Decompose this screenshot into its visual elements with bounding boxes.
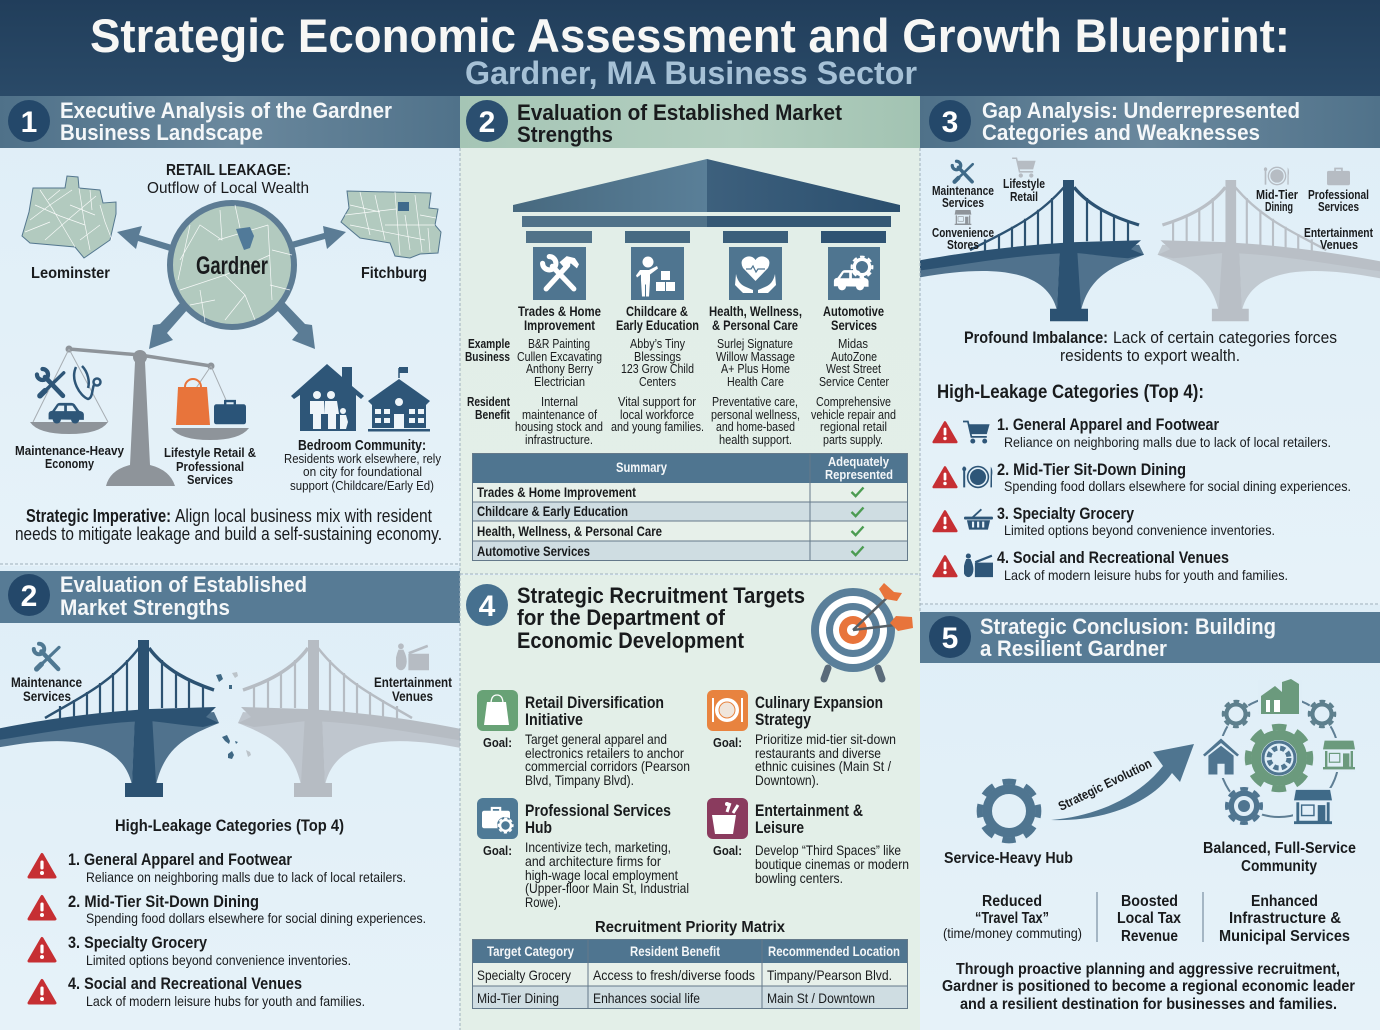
- row labels: Business: [465, 349, 510, 364]
- card: professional services: Hub: [525, 818, 552, 837]
- diagram: balanced community: Community: [1241, 858, 1317, 875]
- list: high-leakage categories: Reliance on neighboring malls due to lack of local retailers.: [1004, 434, 1331, 450]
- column: health, wellness and personal care: Surlej Signature: [717, 336, 793, 351]
- text: strategic imperative: Align local business mix with resident: [175, 506, 432, 526]
- broken bridge illustration: [911, 180, 1380, 321]
- list: high-leakage categories: Reliance on neighboring malls due to lack of local retailers.: [86, 869, 406, 885]
- benefit: boosted local tax revenue: Boosted: [1121, 893, 1178, 910]
- column: automotive services: [811, 247, 896, 447]
- column: trades and home improvement: [515, 247, 603, 447]
- icons: maintenance tools and car: [37, 366, 100, 424]
- card: culinary expansion: Prioritize mid-tier sit-down: [755, 731, 896, 747]
- card: retail diversification: electronics retailers to anchor: [525, 745, 684, 761]
- benefit: reduced travel tax: [943, 893, 1082, 941]
- heading: section 2 left: 2: [21, 580, 37, 613]
- heading: section 5: a Resilient Gardner: [980, 636, 1167, 661]
- heading: section 2 centre: Evaluation of Established Market: [517, 100, 842, 125]
- summary table: Childcare & Early Education: [477, 503, 628, 519]
- column: childcare and early education: [611, 247, 704, 434]
- arrow: strategic evolution: [1051, 744, 1194, 820]
- list: high-leakage categories: 1. General Apparel and Footwear: [997, 415, 1219, 434]
- row labels: Benefit: [475, 407, 511, 422]
- card: entertainment and leisure: Entertainment &: [755, 801, 863, 820]
- panel: executive analysis: [0, 96, 460, 566]
- column: health, wellness and personal care: Preventative care,: [712, 394, 798, 409]
- list: high-leakage categories: 1. General Apparel and Footwear: [68, 850, 292, 869]
- scale comparing economy: [15, 346, 256, 487]
- scale comparing economy: Maintenance-Heavy: [15, 443, 125, 458]
- panel: market strengths, centre column: [460, 96, 920, 574]
- label: maintenance services: Maintenance: [11, 674, 82, 690]
- card: entertainment and leisure: Leisure: [755, 818, 804, 837]
- row labels: Resident: [467, 394, 511, 409]
- summary table: Health, Wellness, & Personal Care: [477, 523, 662, 539]
- card: culinary expansion: [707, 690, 896, 788]
- card: entertainment and leisure: [707, 798, 909, 886]
- column: childcare and early education: 123 Grow Child: [621, 361, 694, 376]
- column: trades and home improvement: Improvement: [524, 317, 595, 333]
- list: high-leakage categories: 4. Social and Recreational Venues: [997, 548, 1229, 567]
- diagram: balanced community: Balanced, Full-Service: [1203, 840, 1356, 857]
- heading: section 4: [466, 583, 805, 653]
- heading: section 3: 3: [942, 106, 958, 139]
- column: automotive services: AutoZone: [831, 349, 877, 364]
- summary table: Represented: [825, 467, 893, 482]
- column: trades and home improvement: Anthony Berry: [526, 361, 593, 376]
- list: high-leakage categories: 4. Social and Recreational Venues: [68, 974, 302, 993]
- text: bedroom community: support (Childcare/Early Ed): [290, 478, 434, 493]
- benefit: reduced travel tax: (time/money commuting): [943, 925, 1082, 941]
- table: recruitment priority matrix: Resident Benefit: [630, 943, 720, 959]
- list: high-leakage categories: Lack of modern leisure hubs for youth and families.: [1004, 567, 1288, 583]
- heading: section 4: for the Department of: [517, 605, 725, 630]
- column: trades and home improvement: Trades & Home: [518, 303, 601, 319]
- label: mid-tier dining: Dining: [1265, 199, 1293, 214]
- text: profound imbalance: residents to export wealth.: [1060, 346, 1240, 365]
- card: retail diversification: Target general apparel and: [525, 731, 667, 747]
- table: recruitment priority matrix: Target Category: [487, 943, 574, 959]
- card: retail diversification: Goal:: [483, 735, 512, 750]
- card: entertainment and leisure: boutique cinemas or modern: [755, 856, 909, 872]
- text: conclusion: Through proactive planning and aggressive recruitment,: [956, 961, 1340, 978]
- heading: section 5: [920, 612, 1380, 663]
- card: culinary expansion: ethnic cuisines (Main St /: [755, 758, 891, 774]
- column: trades and home improvement: B&R Painting: [528, 336, 590, 351]
- card: culinary expansion: restaurants and diverse: [755, 745, 881, 761]
- heading: section 3: Gap Analysis: Underrepresented: [982, 98, 1300, 123]
- summary table: Summary: [616, 459, 667, 475]
- column: health, wellness and personal care: Health, Wellness,: [709, 303, 802, 319]
- list: high-leakage categories: Lack of modern leisure hubs for youth and families.: [86, 993, 365, 1009]
- column: childcare and early education: Abby’s Tiny: [630, 336, 685, 351]
- label: lifestyle retail: [1003, 158, 1045, 204]
- heading: section 5: Strategic Conclusion: Building: [980, 614, 1276, 639]
- scale comparing economy: Services: [187, 472, 233, 487]
- benefit: enhanced infrastructure: Infrastructure &: [1229, 910, 1341, 927]
- list: high-leakage categories: [934, 415, 1351, 583]
- scale comparing economy: Lifestyle Retail &: [164, 445, 256, 460]
- heading: high-leakage categories: High-Leakage Categories (Top 4):: [937, 382, 1204, 403]
- card: culinary expansion: Goal:: [713, 735, 742, 750]
- title banner: Gardner, MA Business Sector: [465, 55, 917, 91]
- node: stores: [1293, 738, 1356, 826]
- benefit: boosted local tax revenue: Local Tax: [1117, 910, 1181, 927]
- heading: section 3: [920, 96, 1380, 148]
- column: automotive services: Comprehensive: [816, 394, 891, 409]
- list: high-leakage categories: Limited options beyond convenience inventories.: [86, 952, 351, 968]
- label: convenience stores: [932, 210, 994, 252]
- card: entertainment and leisure: Goal:: [713, 843, 742, 858]
- card: professional services: (Upper-floor Main St, Industrial: [525, 880, 689, 896]
- label: entertainment venues: [1304, 225, 1374, 252]
- map: Leominster: [22, 176, 116, 282]
- panel: market strengths, left column: [0, 566, 471, 1030]
- heading: section 4: 4: [479, 590, 496, 623]
- list: high-leakage categories: Spending food dollars elsewhere for social dining experiences.: [86, 910, 426, 926]
- column: trades and home improvement: Electrician: [534, 374, 585, 389]
- card: retail diversification: Initiative: [525, 710, 583, 729]
- table: recruitment priority matrix: Main St / Downtown: [767, 990, 875, 1006]
- retail leakage heading: RETAIL LEAKAGE:: [166, 162, 291, 179]
- card: professional services: Goal:: [483, 843, 512, 858]
- label: entertainment venues: Venues: [1320, 237, 1358, 252]
- card: professional services: Professional Services: [525, 801, 671, 820]
- benefit: boosted local tax revenue: Revenue: [1121, 928, 1178, 945]
- node: town buildings: [1258, 679, 1302, 714]
- column: trades and home improvement: Cullen Excavating: [517, 349, 602, 364]
- card: professional services: [477, 798, 689, 910]
- label: mid-tier dining: Mid-Tier: [1256, 187, 1298, 202]
- label: entertainment venues: Venues: [392, 688, 433, 704]
- text: profound imbalance: [964, 328, 1337, 365]
- card: entertainment and leisure: bowling centers.: [755, 870, 843, 886]
- label: convenience stores: Stores: [947, 237, 979, 252]
- card: retail diversification: commercial corridors (Pearson: [525, 758, 690, 774]
- node: house: [1203, 736, 1240, 778]
- heading: section 2 left: Evaluation of Established: [60, 572, 307, 597]
- text: strategic imperative: [15, 506, 442, 544]
- benefit: boosted local tax revenue: [1117, 893, 1181, 945]
- table: recruitment priority matrix: Recommended Location: [768, 943, 900, 959]
- text: bedroom community: Residents work elsewhere, rely: [284, 451, 441, 466]
- heading: section 1: [0, 96, 460, 148]
- column: automotive services: Automotive: [823, 303, 884, 319]
- column: health, wellness and personal care: health support.: [719, 432, 792, 447]
- text: profound imbalance: Lack of certain categories forces: [1113, 328, 1337, 347]
- column: health, wellness and personal care: [709, 247, 802, 447]
- card: culinary expansion: Culinary Expansion: [755, 693, 883, 712]
- row labels: Example: [468, 336, 510, 351]
- arrows: leakage outflow: [117, 226, 346, 349]
- column: trades and home improvement: infrastructure.: [525, 432, 593, 447]
- benefit: enhanced infrastructure: [1219, 893, 1350, 945]
- card: entertainment and leisure: Develop “Third Spaces” like: [755, 842, 901, 858]
- heading: high-leakage categories: High-Leakage Categories (Top 4): [115, 816, 344, 835]
- card: retail diversification: Retail Diversification: [525, 693, 664, 712]
- column: health, wellness and personal care: & Personal Care: [712, 317, 798, 333]
- column: childcare and early education: Early Education: [616, 317, 699, 333]
- column: health, wellness and personal care: A+ Plus Home: [721, 361, 790, 376]
- column: automotive services: West Street: [826, 361, 881, 376]
- column: automotive services: Service Center: [819, 374, 890, 389]
- column: health, wellness and personal care: Willow Massage: [716, 349, 795, 364]
- heading: section 3: Categories and Weaknesses: [982, 120, 1260, 145]
- list: high-leakage categories: 3. Specialty Grocery: [997, 504, 1134, 523]
- text: strategic imperative: needs to mitigate leakage and build a self-sustaining economy.: [15, 524, 442, 544]
- label: maintenance services: Maintenance: [932, 183, 994, 198]
- icons: shopping bag and briefcase: [176, 379, 246, 425]
- panel: gap analysis: [911, 96, 1380, 604]
- icon: service-heavy hub gear: [944, 782, 1073, 867]
- benefit: reduced travel tax: Reduced: [982, 893, 1042, 910]
- column: automotive services: regional retail: [820, 419, 887, 434]
- temple roof: [513, 159, 900, 243]
- label: lifestyle retail: Lifestyle: [1003, 176, 1045, 191]
- column: childcare and early education: Centers: [639, 374, 676, 389]
- column: trades and home improvement: maintenance of: [522, 407, 597, 422]
- retail leakage heading: [147, 162, 309, 197]
- label: maintenance services: Services: [942, 195, 984, 210]
- column: childcare and early education: and young families.: [611, 419, 704, 434]
- icon: service-heavy hub gear: Service-Heavy Hub: [944, 850, 1073, 867]
- benefit: enhanced infrastructure: Enhanced: [1251, 893, 1318, 910]
- title banner: [0, 0, 1380, 96]
- label: professional services: Services: [1318, 199, 1359, 214]
- scale comparing economy: Professional: [176, 459, 244, 474]
- table: recruitment priority matrix: Access to fresh/diverse foods: [593, 967, 755, 983]
- card: professional services: Rowe).: [525, 894, 561, 910]
- text: bedroom community: Bedroom Community:: [298, 437, 426, 454]
- column: childcare and early education: Childcare &: [626, 303, 688, 319]
- arrow: strategic evolution: Strategic Evolution: [1056, 755, 1154, 814]
- list: high-leakage categories: Spending food dollars elsewhere for social dining experiences.: [1004, 478, 1351, 494]
- summary table: [472, 453, 908, 561]
- card: culinary expansion: Strategy: [755, 710, 811, 729]
- icon: target with arrows: [811, 583, 913, 679]
- card: culinary expansion: Downtown).: [755, 772, 819, 788]
- card: professional services: high-wage local employment: [525, 867, 678, 883]
- scale comparing economy: Economy: [45, 456, 95, 471]
- map: Leominster: Leominster: [31, 265, 110, 282]
- list: high-leakage categories: 2. Mid-Tier Sit-Down Dining: [997, 460, 1186, 479]
- column: childcare and early education: Vital support for: [618, 394, 697, 409]
- row labels: [465, 336, 511, 422]
- node: gears: [1221, 699, 1337, 826]
- map circle: Gardner: [170, 203, 294, 327]
- heading: section 2 centre: 2: [479, 106, 495, 139]
- label: entertainment venues: [374, 643, 452, 704]
- label: maintenance services: [932, 161, 994, 210]
- column: health, wellness and personal care: personal wellness,: [711, 407, 800, 422]
- list: high-leakage categories: Limited options beyond convenience inventories.: [1004, 522, 1275, 538]
- summary table: Adequately: [828, 454, 890, 469]
- column: automotive services: parts supply.: [823, 432, 883, 447]
- benefit: enhanced infrastructure: Municipal Services: [1219, 928, 1350, 945]
- label: professional services: [1308, 169, 1369, 214]
- text: strategic imperative: Strategic Imperative:: [26, 506, 171, 526]
- column: automotive services: Services: [831, 317, 877, 333]
- table: recruitment priority matrix: Mid-Tier Dining: [477, 990, 559, 1006]
- map: Fitchburg: Fitchburg: [361, 265, 427, 282]
- panel: strategic recruitment targets: [460, 575, 920, 1030]
- heading: section 1: Business Landscape: [60, 120, 263, 145]
- column: childcare and early education: Blessings: [634, 349, 681, 364]
- text: conclusion: and a resilient destination for businesses and families.: [960, 996, 1337, 1013]
- label: lifestyle retail: Retail: [1010, 189, 1038, 204]
- benefit: reduced travel tax: “Travel Tax”: [975, 910, 1049, 927]
- text: bedroom community: on city for foundational: [303, 464, 422, 479]
- table: recruitment priority matrix: Timpany/Pearson Blvd.: [767, 967, 892, 983]
- heading: section 2 left: [0, 571, 460, 623]
- map: Fitchburg: [341, 191, 441, 282]
- label: maintenance services: [11, 644, 82, 704]
- heading: section 1: Executive Analysis of the Gardner: [60, 98, 392, 123]
- column: automotive services: vehicle repair and: [811, 407, 896, 422]
- text: bedroom community: [284, 437, 441, 493]
- list: high-leakage categories: 3. Specialty Grocery: [68, 933, 207, 952]
- column: health, wellness and personal care: and home-based: [716, 419, 795, 434]
- panel: strategic conclusion: [920, 605, 1380, 1030]
- summary table: Automotive Services: [477, 543, 590, 559]
- icon: house with family and school: [291, 364, 430, 432]
- diagram: balanced community: [1203, 679, 1356, 875]
- map circle: Gardner: Gardner: [196, 252, 268, 280]
- label: entertainment venues: Entertainment: [374, 674, 452, 690]
- broken bridge illustration: [0, 640, 471, 797]
- card: retail diversification: [477, 690, 690, 788]
- table: recruitment priority matrix: Enhances social life: [593, 990, 700, 1006]
- label: mid-tier dining: [1256, 167, 1298, 214]
- heading: section 4: Strategic Recruitment Targets: [517, 583, 805, 608]
- card: retail diversification: Blvd, Timpany Blvd).: [525, 772, 634, 788]
- label: convenience stores: Convenience: [932, 225, 994, 240]
- heading: section 2 centre: [460, 96, 920, 148]
- column: trades and home improvement: Internal: [541, 394, 578, 409]
- text: conclusion: [942, 961, 1355, 1013]
- heading: section 1: 1: [21, 106, 37, 139]
- label: maintenance services: Services: [23, 688, 71, 704]
- column: trades and home improvement: housing stock and: [515, 419, 603, 434]
- table: recruitment priority matrix: Specialty Grocery: [477, 967, 571, 983]
- column: childcare and early education: local workforce: [620, 407, 694, 422]
- heading: section 5: 5: [942, 622, 958, 655]
- column: health, wellness and personal care: Health Care: [727, 374, 784, 389]
- card: professional services: Incentivize tech, marketing,: [525, 839, 671, 855]
- heading: section 4: Economic Development: [517, 628, 744, 653]
- text: profound imbalance: Profound Imbalance:: [964, 328, 1108, 347]
- title banner: Strategic Economic Assessment and Growth Blueprint:: [90, 9, 1290, 62]
- retail leakage heading: Outflow of Local Wealth: [147, 180, 309, 197]
- bridge debris: [216, 672, 251, 759]
- list: high-leakage categories: [29, 850, 426, 1009]
- heading: section 2 left: Market Strengths: [60, 595, 230, 620]
- list: high-leakage categories: 2. Mid-Tier Sit-Down Dining: [68, 892, 259, 911]
- summary table: Trades & Home Improvement: [477, 484, 636, 500]
- card: professional services: and architecture firms for: [525, 853, 661, 869]
- column: automotive services: Midas: [838, 336, 868, 351]
- table: recruitment priority matrix: [472, 939, 908, 1009]
- heading: recruitment priority matrix: Recruitment Priority Matrix: [595, 919, 785, 936]
- heading: section 2 centre: Strengths: [517, 122, 613, 147]
